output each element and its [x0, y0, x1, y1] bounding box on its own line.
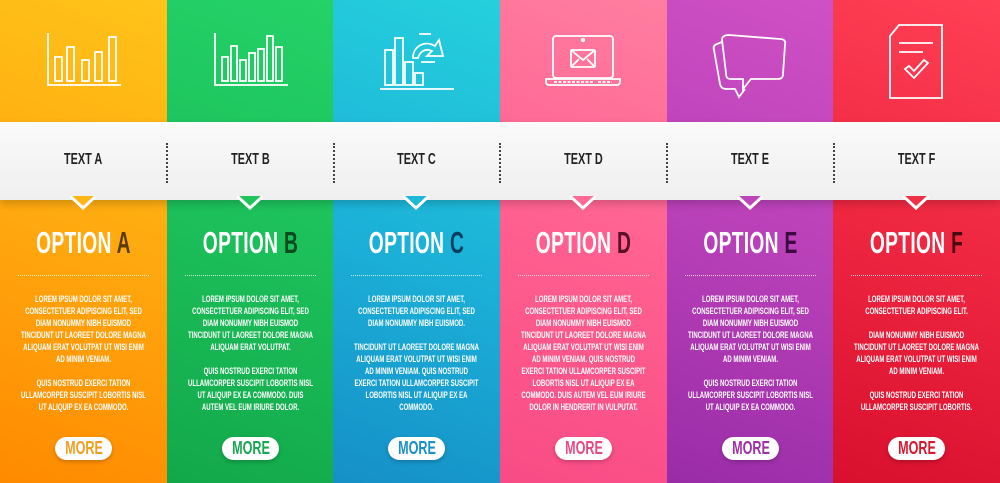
text block: F: ALIQUAM ERAT VOLUTPAT UT WISI ENIM	[856, 354, 977, 365]
text block: A: UT ALIQUIP EX EA COMMODO.	[39, 402, 128, 413]
text block: A: CONSECTETUER ADIPISCING ELIT, SED	[25, 306, 142, 317]
text block: A: ULLAMCORPER SUSCIPIT LOBORTIS NISL	[21, 390, 146, 401]
text block: E: UT ALIQUIP EX EA COMMODO.	[706, 402, 795, 413]
icon: laptop mail	[545, 35, 621, 86]
panel: option E	[667, 0, 834, 483]
button: more C	[388, 437, 445, 460]
button: more B	[222, 437, 279, 460]
button: more C: MORE	[398, 438, 435, 458]
heading: option D: OPTION D	[536, 225, 631, 260]
text block: E: AD MINIM VENIAM.	[723, 354, 778, 365]
text block: E: DIAM NONUMMY NIBH EUISMOD	[703, 318, 798, 329]
heading: option F: OPTION F	[870, 225, 963, 260]
icon: bar chart B	[214, 33, 288, 86]
text block: C: COMMODO.	[399, 402, 434, 413]
notch A	[70, 196, 96, 210]
text block: E: ALIQUAM ERAT VOLUTPAT UT WISI ENIM	[690, 342, 811, 353]
text block: B: QUIS NOSTRUD EXERCI TATION	[204, 366, 297, 377]
text block: B: TINCIDUNT UT LAOREET DOLORE MAGNA	[188, 330, 313, 341]
icon: bar chart	[47, 33, 121, 86]
text block: E: QUIS NOSTRUD EXERCI TATION	[704, 378, 797, 389]
text block: B: DIAM NONUMMY NIBH EUISMOD	[203, 318, 298, 329]
notch D	[570, 196, 596, 210]
icon: speech bubbles	[712, 34, 786, 99]
text block: A: DIAM NONUMMY NIBH EUISMOD	[36, 318, 131, 329]
text block: A: ALIQUAM ERAT VOLUTPAT UT WISI ENIM	[23, 342, 144, 353]
text block: D: AD MINIM VENIAM. QUIS NOSTRUD	[532, 354, 635, 365]
text block: D: DIAM NONUMMY NIBH EUISMOD	[536, 318, 631, 329]
text block: C: ALIQUAM ERAT VOLUTPAT UT WISI ENIM	[356, 354, 477, 365]
button: more A: MORE	[65, 438, 102, 458]
text block: B: AUTEM VEL EUM IRIURE DOLOR.	[202, 402, 299, 413]
text block: E: ULLAMCORPER SUSCIPIT LOBORTIS NISL	[688, 390, 813, 401]
heading: option A: OPTION A	[36, 225, 131, 260]
icon: document check	[889, 24, 943, 99]
text block: A: AD MINIM VENIAM.	[56, 354, 111, 365]
text block: D: COMMODO. DUIS AUTEM VEL EUM IRIURE	[521, 390, 646, 401]
text block: B: LOREM IPSUM DOLOR SIT AMET,	[202, 294, 299, 305]
text block: F: ULLAMCORPER SUSCIPIT LOBORTIS.	[861, 402, 972, 413]
panel: option D	[500, 0, 667, 483]
text block: F: QUIS NOSTRUD EXERCI TATION	[870, 390, 963, 401]
panel: option B	[167, 0, 334, 483]
text block: A: LOREM IPSUM DOLOR SIT AMET,	[35, 294, 132, 305]
label F: TEXT F	[898, 151, 935, 168]
text block: A	[21, 294, 146, 413]
text block: D: DOLOR IN HENDRERIT IN VULPUTAT.	[529, 402, 638, 413]
text block: E: TINCIDUNT UT LAOREET DOLORE MAGNA	[688, 330, 813, 341]
notch E	[737, 196, 763, 210]
text block: D: LOREM IPSUM DOLOR SIT AMET,	[535, 294, 632, 305]
button: more D: MORE	[565, 438, 602, 458]
text block: C: DIAM NONUMMY NIBH EUISMOD.	[368, 318, 465, 329]
text block: C: LOBORTIS NISL UT ALIQUIP EX EA	[366, 390, 467, 401]
text block: B: ULLAMCORPER SUSCIPIT LOBORTIS NISL	[188, 378, 313, 389]
text block: C: AD MINIM VENIAM. QUIS NOSTRUD	[365, 366, 468, 377]
text block: C	[354, 294, 479, 413]
text block: F: LOREM IPSUM DOLOR SIT AMET,	[868, 294, 965, 305]
text block: F: DIAM NONUMMY NIBH EUISMOD	[869, 330, 964, 341]
label A: TEXT A	[64, 151, 103, 168]
panel: option F	[833, 0, 1000, 483]
band: labels	[0, 122, 1000, 200]
text block: C: EXERCI TATION ULLAMCORPER SUSCIPIT	[354, 378, 479, 389]
panel: option A	[0, 0, 167, 483]
notch B	[237, 196, 263, 210]
text block: E: LOREM IPSUM DOLOR SIT AMET,	[702, 294, 799, 305]
heading: option C: OPTION C	[369, 225, 464, 260]
text block: E: CONSECTETUER ADIPISCING ELIT, SED	[692, 306, 809, 317]
text block: B: UT ALIQUIP EX EA COMMODO. DUIS	[198, 390, 303, 401]
icon: chart with arrow	[380, 33, 454, 90]
text block: D	[521, 294, 646, 413]
text block: E	[688, 294, 813, 413]
text block: B: CONSECTETUER ADIPISCING ELIT, SED	[192, 306, 309, 317]
notch F	[903, 196, 929, 210]
heading: option B: OPTION B	[203, 225, 298, 260]
text block: C: LOREM IPSUM DOLOR SIT AMET,	[368, 294, 465, 305]
button: more F: MORE	[898, 438, 935, 458]
label B: TEXT B	[231, 151, 270, 168]
text block: C: CONSECTETUER ADIPISCING ELIT, SED	[358, 306, 475, 317]
text block: F	[854, 294, 979, 413]
text block: F: TINCIDUNT UT LAOREET DOLORE MAGNA	[854, 342, 979, 353]
text block: D: EXERCI TATION ULLAMCORPER SUSCIPIT	[521, 366, 646, 377]
button: more E	[722, 437, 779, 460]
text block: F: CONSECTETUER ADIPISCING ELIT.	[865, 306, 968, 317]
button: more E: MORE	[732, 438, 769, 458]
notch C	[403, 196, 429, 210]
button: more D	[555, 437, 612, 460]
text block: C: TINCIDUNT UT LAOREET DOLORE MAGNA	[354, 342, 479, 353]
text block: A: QUIS NOSTRUD EXERCI TATION	[37, 378, 130, 389]
button: more A	[55, 437, 112, 460]
heading: option E: OPTION E	[703, 225, 798, 260]
text block: B: ALIQUAM ERAT VOLUTPAT.	[210, 342, 291, 353]
label E: TEXT E	[731, 151, 770, 168]
button: more B: MORE	[232, 438, 269, 458]
label D: TEXT D	[564, 151, 603, 168]
text block: D: CONSECTETUER ADIPISCING ELIT, SED	[525, 306, 642, 317]
label C: TEXT C	[397, 151, 436, 168]
text block: A: TINCIDUNT UT LAOREET DOLORE MAGNA	[21, 330, 146, 341]
panel: option C	[333, 0, 500, 483]
text block: F: AD MINIM VENIAM.	[889, 366, 944, 377]
text block: D: LOBORTIS NISL UT ALIQUIP EX EA	[533, 378, 634, 389]
text block: B	[188, 294, 313, 413]
text block: D: TINCIDUNT UT LAOREET DOLORE MAGNA	[521, 330, 646, 341]
button: more F	[888, 437, 945, 460]
text block: D: ALIQUAM ERAT VOLUTPAT UT WISI ENIM	[523, 342, 644, 353]
